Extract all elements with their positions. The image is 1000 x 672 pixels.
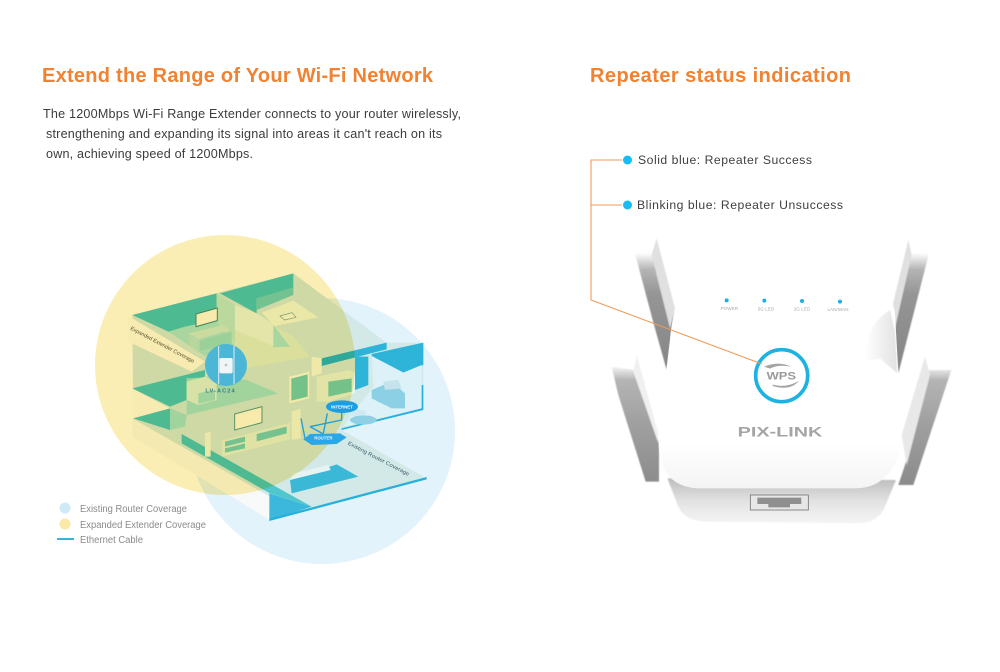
outer cream walls [128, 316, 205, 372]
device: extender [612, 238, 951, 523]
status: blinking blue: Blinking blue: Repeater Unsuccess [637, 198, 843, 212]
antenna: front right [898, 357, 951, 485]
label: expanded extender coverage: Expanded Extender Coverage [129, 326, 195, 365]
internet cloud: INTERNET [331, 404, 353, 409]
legend [57, 502, 206, 546]
text block: description: strengthening and expanding its signal into areas it can't reach on its [46, 127, 442, 141]
antenna: front left [612, 355, 659, 482]
text block: description: The 1200Mbps Wi-Fi Range Extender connects to your router wirelessly, [43, 107, 461, 121]
text block: description [43, 107, 461, 161]
house floor plan [128, 273, 427, 521]
router icon with cables: ROUTER [314, 435, 333, 440]
led labels: 2G LED [794, 307, 811, 312]
legend: extender coverage: Expanded Extender Coverage [80, 520, 206, 531]
led labels: POWER [721, 306, 739, 311]
led labels: LAN/WAN [827, 307, 849, 312]
extender coverage circle [95, 235, 355, 495]
callout lines [591, 160, 762, 364]
extender badge [205, 344, 247, 394]
internet cloud [326, 400, 358, 413]
furniture: living room [187, 377, 301, 457]
chart: coverage floor plan [95, 235, 455, 564]
furniture: door [289, 372, 309, 403]
lower base [667, 478, 896, 523]
furniture: desk and tv [188, 308, 232, 353]
brand: pix-link: PIX-LINK [738, 424, 822, 440]
title: repeater status: Repeater status indication [590, 65, 851, 87]
label: existing router coverage: Existing Router Coverage [346, 441, 410, 478]
antenna: back right [893, 240, 929, 373]
status leds [725, 298, 842, 304]
legend: router coverage: Existing Router Coverage [80, 504, 187, 515]
furniture: cabinet and right room [312, 357, 405, 425]
led labels: 5G LED [758, 306, 775, 311]
top cover [659, 286, 902, 488]
status: solid blue: Solid blue: Repeater Success [638, 153, 812, 167]
ethernet port [750, 495, 808, 510]
legend: ethernet cable: Ethernet Cable [80, 535, 143, 546]
badge and network icons [205, 344, 358, 445]
furniture: bed [257, 287, 318, 326]
router icon with cables [301, 413, 347, 445]
text block: description: own, achieving speed of 1200Mbps. [46, 147, 253, 161]
extender badge: LV-AC24 [205, 388, 236, 394]
title: extend the range: Extend the Range of Your Wi-Fi Network [42, 65, 434, 87]
antenna: back left [635, 238, 675, 370]
router coverage circle [189, 298, 455, 564]
wps button: WPS [767, 371, 796, 383]
cover highlight [865, 310, 897, 373]
led labels [721, 306, 849, 312]
wps button [756, 350, 808, 402]
